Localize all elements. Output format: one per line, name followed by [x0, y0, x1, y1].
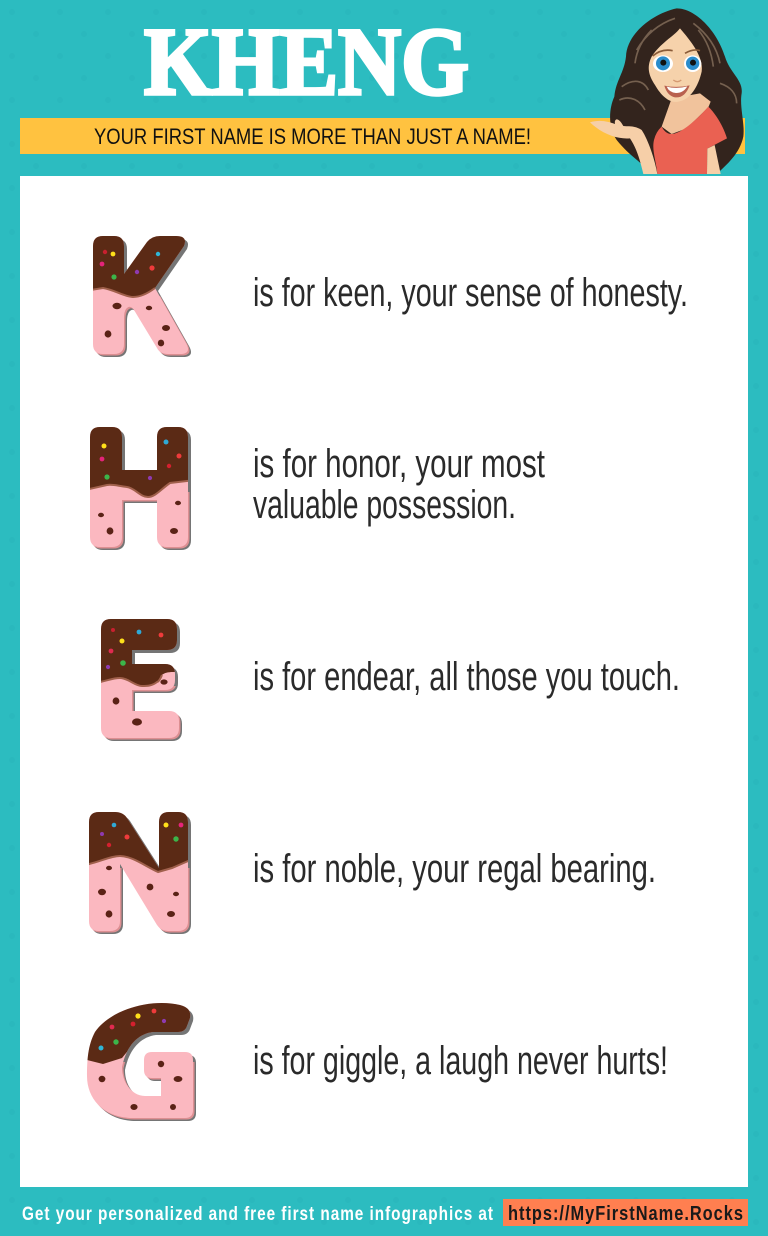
- letter K: [93, 236, 191, 357]
- character illustration: woman presenting: [590, 8, 744, 174]
- row E: [95, 612, 680, 741]
- banner: [20, 118, 745, 154]
- text H: valuable possession.: [253, 483, 516, 527]
- footer invitation text: Get your personalized and free first name infographics at: [22, 1204, 494, 1225]
- banner: YOUR FIRST NAME IS MORE THAN JUST A NAME!: [94, 124, 531, 149]
- text H: [253, 442, 545, 527]
- title: KHENG: [144, 8, 469, 115]
- footer: [22, 1199, 748, 1226]
- letter H: [90, 427, 191, 550]
- row N: [85, 805, 656, 934]
- white content panel: [20, 176, 748, 1187]
- text H: is for honor, your most: [253, 442, 545, 486]
- letter E: [101, 619, 182, 741]
- letter N: [89, 812, 191, 934]
- letter G: [87, 1003, 196, 1121]
- row G: [80, 995, 668, 1121]
- row K: [85, 228, 688, 357]
- row H: [85, 420, 545, 550]
